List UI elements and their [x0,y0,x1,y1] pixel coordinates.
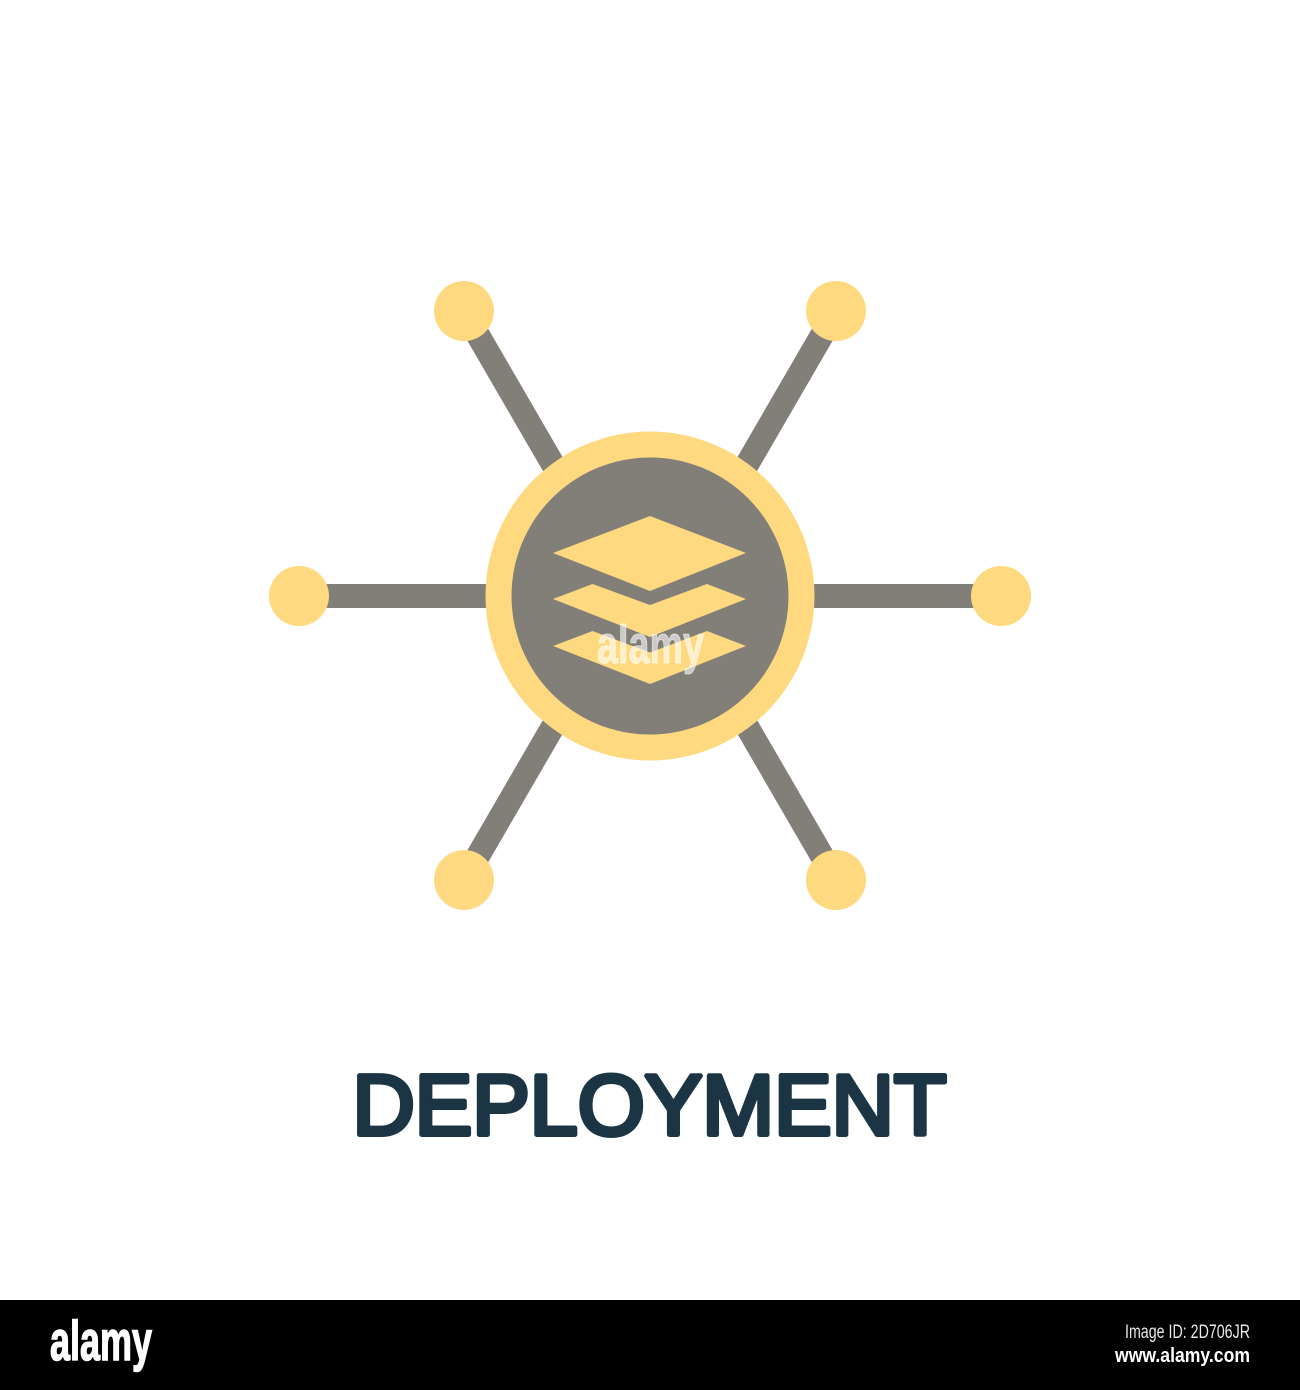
footer logo: alamy [50,1309,152,1372]
layers stack [553,516,746,684]
watermark: alamy [597,615,704,675]
central hub [486,432,814,760]
website: www.alamy.com [1114,1345,1250,1367]
outer nodes [269,281,1031,910]
image id: Image ID: 2D706JR [1125,1322,1250,1343]
connector lines [299,311,1001,880]
title: DEPLOYMENT [352,1058,946,1154]
icon: deployment network [269,281,1031,910]
footer bar [0,1300,1300,1390]
